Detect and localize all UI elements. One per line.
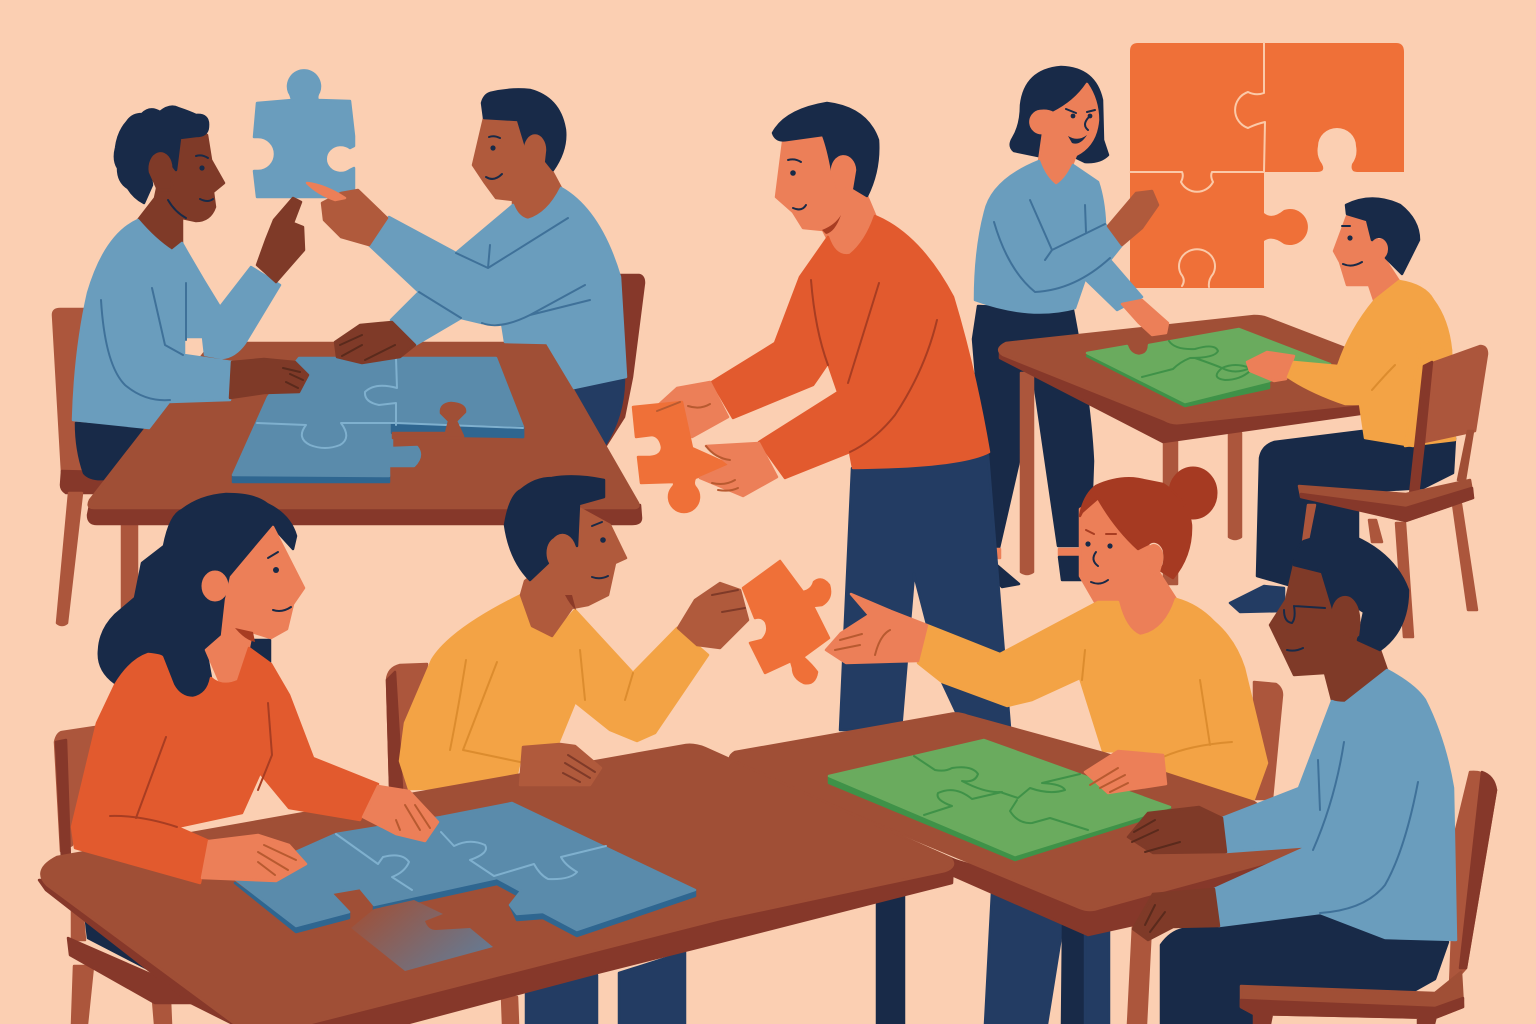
right seated man in yellow with chair: [1230, 198, 1487, 637]
man with glasses in blue sweater and chair: [1128, 535, 1496, 1024]
blue puzzle: [233, 427, 523, 482]
top right table with green puzzle: [999, 316, 1360, 584]
wall puzzle: [1130, 43, 1404, 288]
hands: [1128, 807, 1226, 853]
sweater: [73, 220, 280, 428]
faded puzzle piece: [351, 900, 493, 971]
upper hand: [655, 382, 728, 437]
woman in orange sweater with long hair: [72, 494, 438, 883]
hand: [1085, 751, 1166, 793]
floating blue puzzle piece: [254, 70, 354, 197]
open hand: [826, 594, 927, 663]
yellow man's sweater behind table: [400, 595, 708, 789]
bottom left table with blue puzzle: [39, 745, 953, 1024]
top left chairs and trousers: [53, 275, 644, 625]
green puzzle: [1087, 356, 1269, 406]
raised hand: [257, 198, 304, 282]
woman with red bun in yellow sweater: [826, 467, 1267, 799]
hand on table: [335, 322, 415, 363]
bottom left chairs and trousers: [55, 664, 685, 1024]
lower hand: [700, 443, 777, 496]
top left man in blue sweater: [73, 107, 308, 428]
green puzzle: [829, 776, 1170, 860]
blue puzzle: [235, 878, 695, 936]
held orange puzzle piece: [633, 402, 730, 512]
pointing hand: [322, 190, 387, 245]
standing woman upper body: [975, 67, 1168, 335]
man in yellow sweater head and hands: [505, 476, 748, 785]
sweater: [369, 188, 626, 388]
centre man in orange sweater: [633, 103, 1010, 730]
sweater: [918, 599, 1267, 799]
bottom right table legs and figures behind: [877, 682, 1282, 1024]
hands: [363, 786, 438, 841]
standing woman trousers and shoes: [973, 306, 1093, 587]
hands: [520, 744, 601, 785]
bottom right table with green puzzle: [730, 713, 1312, 935]
sweater: [1214, 670, 1456, 940]
sweater: [712, 216, 989, 478]
top left table with blue puzzle: [88, 343, 641, 524]
brown notch tab: [393, 403, 465, 438]
sweater: [72, 648, 378, 883]
top right man in blue sweater: [307, 89, 626, 388]
floating orange puzzle piece: [743, 561, 830, 683]
